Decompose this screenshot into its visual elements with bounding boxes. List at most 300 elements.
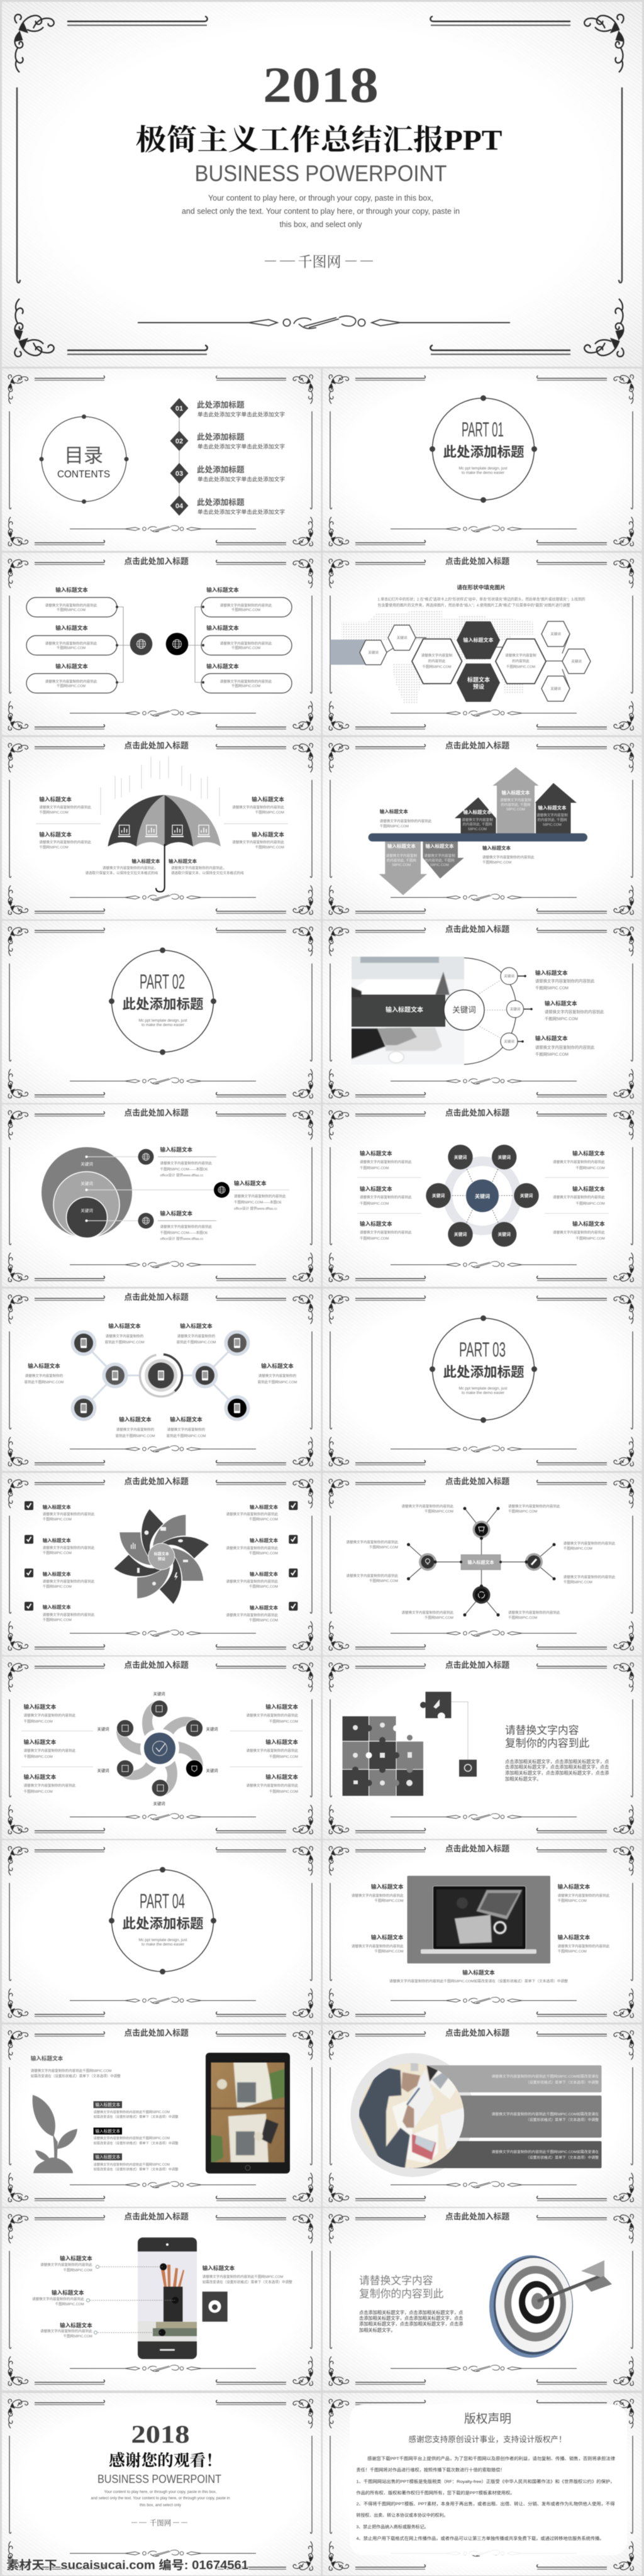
- tablet photo: [208, 2060, 287, 2165]
- pinwheel icons: [131, 1527, 188, 1585]
- left labels: 请替换文字内容复制你的内容到此: [24, 1783, 76, 1788]
- right labels: 输入标题文本: [206, 586, 239, 593]
- left checklist: 请替换文字内容复制你的内容到此: [43, 1613, 95, 1618]
- left labels: 千图网58PIC.COM: [24, 1789, 53, 1794]
- right checklist: 输入标题文本: [250, 1537, 278, 1543]
- branch end dots: [407, 1507, 556, 1616]
- branch labels: 千图网58PIC.COM: [425, 1615, 453, 1620]
- left checklist: 千图网58PIC.COM: [43, 1584, 72, 1589]
- panel: part 04 divider: [2, 1840, 321, 2023]
- year: 2018: [131, 2420, 190, 2448]
- nested circles: [42, 1147, 132, 1238]
- label upper left: 千图网58PIC.COM: [374, 1898, 404, 1903]
- label three: 请替换文字内容复制你的内容到此: [40, 2329, 92, 2334]
- icon: plant: [33, 2095, 77, 2174]
- tag two text: 如需改变请在（设置形状格式）菜单下（文本选项）中调整: [94, 2140, 178, 2145]
- ornamental frame: [8, 2031, 313, 2202]
- title: 极简主义工作总结汇报PPT: [136, 124, 502, 156]
- labels: 请替换文字内容复制你的: [177, 1333, 216, 1338]
- upper text: [380, 808, 432, 829]
- bottom labels: 请替换文字内容复制你的内容到此，: [103, 865, 158, 870]
- hexagon keyword right bottom: 关键词: [550, 686, 561, 691]
- right labels: 千图网58PIC.COM: [576, 1201, 605, 1206]
- item 02: 单击此处添加文字单击此处添加文字: [197, 443, 285, 450]
- pale ring: [448, 1161, 517, 1230]
- left labels: [24, 1703, 76, 1794]
- part caption: to make the demo easier: [142, 1942, 184, 1947]
- right labels: 千图网58PIC.COM: [269, 1789, 298, 1794]
- icon circles: [117, 1701, 203, 1796]
- arrow down light: 输入标题文本: [387, 843, 416, 849]
- label upper right: 请替换文字内容复制你的内容到此: [558, 1893, 610, 1898]
- arrow up light centre: 58PIC.COM: [506, 808, 525, 811]
- headline: 复制你的内容到此: [359, 2288, 443, 2300]
- junction dots: [434, 1537, 528, 1587]
- dotted links: [477, 980, 506, 1038]
- part number: PART 02: [140, 970, 185, 993]
- label top: 千图网58PIC.COM: [535, 985, 569, 991]
- panel: copyright slide: [323, 2393, 641, 2575]
- keyword node middle: 关键词: [510, 1006, 521, 1011]
- item 02: [170, 431, 285, 451]
- branch labels: 请替换文字内容复制你的内容到此: [564, 1541, 616, 1546]
- node bottom: [473, 1586, 491, 1604]
- arrow down light: 请替换文字内容复制: [386, 853, 418, 858]
- arrow down mid: 请替换文字内容复制: [424, 853, 455, 858]
- right labels: [206, 586, 272, 688]
- connector: [452, 1702, 468, 1760]
- navy bar: [369, 833, 587, 841]
- lower text: [482, 845, 535, 865]
- ornamental frame: [329, 1846, 633, 2018]
- item 04: [170, 496, 285, 516]
- bar one: 请替换文字内容复制你的内容到此千图网58PIC.COM如需改变请在: [492, 2074, 599, 2079]
- right labels: 千图网58PIC.COM: [231, 608, 260, 613]
- left labels: 请替换文字内容复制你的内容到此: [39, 840, 91, 845]
- arrow dart: [538, 2260, 612, 2301]
- panel: nested circles slide: [2, 1104, 321, 1287]
- ornamental frame: [8, 2399, 313, 2570]
- right label: 请替换文字内容复制你的内容到此千图网58PIC.COM: [203, 2274, 284, 2279]
- branch labels: 千图网58PIC.COM: [564, 1580, 592, 1585]
- arrow up dark right: [535, 783, 577, 833]
- pointer dots: [158, 2263, 179, 2336]
- label top: [158, 1146, 216, 1177]
- left labels: 千图网58PIC.COM: [360, 1165, 389, 1170]
- right labels: 千图网58PIC.COM: [269, 1754, 298, 1759]
- puzzle grid: [342, 1716, 424, 1796]
- hexagon large left: 的内容到此: [428, 658, 446, 663]
- right labels: 请替换文字内容复制你的内容到此: [220, 602, 272, 608]
- part caption: to make the demo easier: [142, 1023, 184, 1028]
- left checklist: 请替换文字内容复制你的内容到此: [43, 1579, 95, 1584]
- puzzle icons: [353, 1723, 413, 1786]
- label upper left: 请替换文字内容复制你的内容到此: [352, 1893, 404, 1898]
- arrow up light centre: 的内容到此, 千图网: [501, 802, 531, 808]
- left labels: 千图网58PIC.COM: [24, 1719, 53, 1724]
- left checklist: 请替换文字内容复制你的内容到此: [43, 1512, 95, 1517]
- arrow down mid: 的内容到此, 千图网: [425, 858, 455, 863]
- label middle: 千图网58PIC.COM——本图OE: [234, 1200, 282, 1205]
- loose puzzle piece: [420, 1692, 452, 1720]
- part number: PART 04: [140, 1890, 185, 1913]
- small puzzle piece: [459, 1760, 477, 1777]
- left labels: 输入标题文本: [360, 1220, 392, 1227]
- keyword labels: 关键词: [153, 1801, 165, 1806]
- hexagon dark bottom: [457, 663, 500, 702]
- right labels: 请替换文字内容复制你的内容到此: [246, 1713, 298, 1718]
- dashed leader lines: [88, 2267, 175, 2333]
- right labels: 输入标题文本: [206, 625, 239, 631]
- bar three: （设置形状格式）菜单下（文本选项）中调整: [526, 2155, 599, 2160]
- panel: part 02 divider: [2, 921, 321, 1103]
- node lower left: [70, 1395, 97, 1421]
- bar one: [426, 2065, 601, 2092]
- branch labels: 千图网58PIC.COM: [564, 1546, 592, 1551]
- headline: 复制你的内容到此: [505, 1737, 589, 1750]
- tag two text: [94, 2136, 178, 2145]
- photo label band: 输入标题文本: [386, 1006, 423, 1014]
- label lower right: 千图网58PIC.COM: [558, 1948, 587, 1953]
- right labels: 千图网58PIC.COM: [255, 810, 284, 815]
- part caption: [138, 1938, 187, 1947]
- icon: globe middle: [214, 1182, 230, 1197]
- ornamental frame: [329, 1479, 633, 1650]
- circle keywords: 关键词: [80, 1180, 93, 1186]
- ornamental frame: [8, 1111, 313, 1282]
- keyword node bottom: 关键词: [504, 1039, 514, 1044]
- right labels: [232, 796, 284, 850]
- panel: laptop slide: [323, 1840, 641, 2023]
- right labels: 请替换文字内容复制你的内容到此: [553, 1195, 605, 1200]
- paragraph: [377, 597, 585, 608]
- right checklist: 请替换文字内容复制你的内容到此: [226, 1546, 278, 1551]
- left checklist: 输入标题文本: [43, 1537, 71, 1543]
- description: and select only the text. Your content to play here, or through your copy, paste in: [91, 2497, 230, 2501]
- right labels: 请替换文字内容复制你的内容到此: [553, 1230, 605, 1235]
- arrow up dark left: 请替换文字内容复制: [462, 818, 493, 823]
- labels: 输入标题文本: [119, 1416, 152, 1423]
- left labels: 输入标题文本: [24, 1738, 57, 1745]
- hub centre: 关键词: [475, 1193, 490, 1199]
- upper text: 请替换文字内容复制你的内容到此: [380, 819, 432, 824]
- part caption: Mc ppt template design, just: [138, 1019, 187, 1023]
- right checklist: 输入标题文本: [250, 1504, 278, 1510]
- left checklist: [25, 1501, 95, 1623]
- heading text: 如需改变请在（设置形状格式）菜单下（文本选项）中调整: [31, 2074, 121, 2079]
- right labels: 千图网58PIC.COM: [231, 683, 260, 688]
- ornamental frame: [329, 559, 633, 730]
- part caption: Mc ppt template design, just: [138, 1938, 187, 1942]
- branch labels: 请替换文字内容复制你的内容到此: [508, 1610, 560, 1615]
- arrow down mid: 58PIC.COM: [430, 863, 449, 867]
- central node: [140, 1355, 182, 1396]
- dividers: [21, 1731, 303, 1767]
- labels: 输入标题文本: [108, 1323, 141, 1330]
- right labels: 输入标题文本: [206, 663, 239, 670]
- heading: 请在形状中填充图片: [457, 584, 506, 591]
- right label: 输入标题文本: [203, 2264, 235, 2271]
- slide title: 点击此处加入标题: [124, 741, 189, 750]
- arrow up dark right: 的内容到此, 千图网: [537, 818, 567, 823]
- bottom labels: 请选取只保留文本，以保持全文拉文本格式的纯: [171, 870, 244, 875]
- left labels: 请替换文字内容复制你的内容到此: [45, 641, 97, 646]
- lower text: 请替换文字内容复制你的内容到此: [482, 855, 535, 860]
- label lower right: [558, 1934, 610, 1953]
- left labels: 输入标题文本: [24, 1774, 57, 1780]
- contents heading: 目录: [64, 445, 103, 467]
- right checklist: 请替换文字内容复制你的内容到此: [226, 1613, 278, 1618]
- panel: branching network slide: [323, 1473, 641, 1655]
- label lower right: 请替换文字内容复制你的内容到此: [558, 1943, 610, 1948]
- bottom labels: 请替换文字内容复制你的内容到此，: [171, 865, 226, 870]
- label upper left: 输入标题文本: [371, 1883, 404, 1890]
- labels: 容到此千图网58PIC.COM: [25, 1380, 64, 1385]
- satellite nodes: [426, 1145, 539, 1246]
- photo: laptop at desk: [351, 956, 464, 1064]
- subtitle: BUSINESS POWERPOINT: [97, 2473, 221, 2485]
- legal text: 转授权、出卖、转让本协议或本协议中的权利。: [356, 2512, 448, 2518]
- item 03: 03: [175, 470, 183, 478]
- paragraph: 点击添加相关标题文字，点击添加相关标题文字，点: [359, 2309, 463, 2316]
- panel: plant and tablet slide: [2, 2024, 321, 2207]
- paragraph: 加相关标题文字。: [359, 2327, 396, 2333]
- panel: circular photo with bars slide: [323, 2024, 641, 2207]
- heading: 版权声明: [464, 2412, 511, 2425]
- label top: 请替换文字内容复制你的内容到此: [160, 1161, 213, 1166]
- hexagon large left: 请替换文字内容复制: [421, 653, 453, 658]
- part heading: 此处添加标题: [122, 997, 204, 1012]
- slide title: 点击此处加入标题: [445, 2028, 509, 2038]
- ornamental frame: [329, 1111, 633, 1282]
- label bottom: 请替换文字内容复制你的内容到此: [160, 1224, 213, 1229]
- bottom labels: 输入标题文本: [169, 858, 197, 864]
- panel: part 03 divider: [323, 1289, 641, 1471]
- pinwheel centre text: [154, 1552, 169, 1562]
- big arc: [464, 958, 516, 1064]
- tag one text: [94, 2109, 178, 2119]
- slide title: 点击此处加入标题: [445, 2212, 509, 2221]
- left labels: [360, 1150, 412, 1241]
- slide title: 点击此处加入标题: [124, 557, 189, 566]
- ornamental frame: [329, 375, 633, 546]
- headline: [505, 1724, 589, 1750]
- slide title: 点击此处加入标题: [445, 1108, 509, 1118]
- contents subheading: CONTENTS: [57, 469, 110, 480]
- arrow down mid: [423, 841, 464, 879]
- heading text: [31, 2055, 121, 2079]
- part heading: 此处添加标题: [443, 1365, 525, 1380]
- hexagon dark top: 输入标题文本: [463, 636, 493, 643]
- left labels: 请替换文字内容复制你的内容到此: [360, 1160, 412, 1165]
- dividers: [357, 1177, 609, 1213]
- arrow up light centre: [492, 767, 539, 833]
- thanks heading: 感谢您的观看！: [109, 2451, 222, 2470]
- pinwheel centre text: 预设: [158, 1557, 165, 1562]
- labels: 输入标题文本: [28, 1362, 60, 1369]
- node upper left: [70, 1330, 97, 1356]
- panel: hexagon slide: [323, 553, 641, 735]
- headline: [359, 2275, 443, 2300]
- label upper right: 千图网58PIC.COM: [558, 1898, 587, 1903]
- bar three: 请替换文字内容复制你的内容到此千图网58PIC.COM如需改变请在: [492, 2149, 599, 2154]
- arrow up dark right: 输入标题文本: [538, 804, 567, 811]
- panel: arrows slide: [323, 737, 641, 919]
- panel: part 01 divider: [323, 369, 641, 551]
- right label: 如需改变请在（设置形状格式）菜单下（文本选项）中调整: [203, 2279, 292, 2284]
- hexagon keyword right top: 关键词: [550, 631, 561, 636]
- ornamental frame: [14, 14, 624, 357]
- label two: 输入标题文本: [52, 2289, 84, 2296]
- leader lines: [87, 1157, 214, 1221]
- bottom labels: [85, 858, 244, 875]
- circle keywords: [80, 1161, 93, 1213]
- item 04: 单击此处添加文字单击此处添加文字: [197, 508, 285, 515]
- swirl petals: [111, 1702, 209, 1795]
- dividers: [36, 823, 288, 824]
- right checklist: 千图网58PIC.COM: [249, 1517, 278, 1522]
- part number: PART 01: [462, 418, 504, 441]
- hexagon large right: 请替换文字内容复制: [505, 653, 536, 658]
- tag one text: 如需改变请在（设置形状格式）菜单下（文本选项）中调整: [94, 2114, 178, 2119]
- satellite labels: 关键词: [520, 1192, 533, 1199]
- umbrella icons: [118, 825, 210, 836]
- keyword node top: 关键词: [504, 974, 514, 979]
- label lower left: 请替换文字内容复制你的内容到此: [352, 1943, 404, 1948]
- tag three: 输入标题文本: [96, 2154, 120, 2160]
- right labels: 请替换文字内容复制你的内容到此: [553, 1160, 605, 1165]
- part caption: Mc ppt template design, just: [458, 467, 508, 470]
- labels: 输入标题文本: [261, 1362, 294, 1369]
- panel: two-sided rounded boxes slide: [2, 553, 321, 735]
- left labels: 千图网58PIC.COM: [39, 845, 69, 850]
- item 02: 此处添加标题: [197, 432, 245, 441]
- keyword node bottom: [501, 1033, 524, 1050]
- circular photo: [358, 2063, 465, 2168]
- label bottom: 请替换文字内容复制你的内容到此: [535, 1044, 595, 1050]
- left checklist: 千图网58PIC.COM: [43, 1550, 72, 1555]
- left labels: 千图网58PIC.COM: [57, 645, 86, 650]
- right labels: 千图网58PIC.COM: [255, 845, 284, 850]
- labels: 输入标题文本: [170, 1416, 203, 1423]
- arrow up dark right: 请替换文字内容复制: [536, 813, 568, 818]
- photo label band: [352, 995, 445, 1026]
- ornamental frame: [8, 1295, 313, 1466]
- paragraph: 点击添加相关标题文字，点击添加相关标题文字，点: [505, 1758, 609, 1765]
- phone body: [138, 2238, 197, 2359]
- paragraph: 击添加相关标题文字，点击添加相关标题文字，点击: [505, 1764, 609, 1770]
- keyword labels: 关键词: [206, 1767, 218, 1774]
- tag two text: 请替换文字内容复制你的内容到此千图网58PIC.COM: [94, 2136, 170, 2141]
- label lower left: [352, 1934, 404, 1953]
- part caption: Mc ppt template design, just: [458, 1386, 508, 1391]
- part number: PART 03: [459, 1338, 506, 1361]
- hexagon keyword right middle: 关键词: [571, 659, 582, 664]
- slide title: 点击此处加入标题: [124, 2212, 189, 2221]
- legal text: 3、禁止把作品纳入商标或服务标记。: [356, 2524, 429, 2529]
- label bottom: 千图网58PIC.COM——本图OE: [160, 1230, 208, 1235]
- left labels: 千图网58PIC.COM: [360, 1201, 389, 1206]
- left labels: [45, 586, 97, 688]
- branch lines: [409, 1509, 554, 1615]
- panel: swirl hub slide: [2, 1657, 321, 1839]
- bottom labels: 请选取只保留文本，以保持全文拉文本格式的纯: [85, 870, 158, 875]
- label bottom: [158, 1210, 216, 1241]
- ornamental frame: [8, 743, 313, 914]
- right labels: 请替换文字内容复制你的内容到此: [246, 1783, 298, 1788]
- branch labels: [346, 1504, 616, 1620]
- description: [91, 2490, 230, 2507]
- panel: contents slide: [2, 369, 321, 551]
- keyword labels: [97, 1690, 218, 1806]
- laptop screen photo: [455, 1890, 522, 1944]
- panel: smartphone slide: [2, 2208, 321, 2390]
- description: Your content to play here, or through your copy, paste in this box,: [104, 2490, 217, 2494]
- ornamental frame: [329, 1295, 633, 1466]
- ornamental frame: [8, 1663, 313, 1834]
- pale disc: [351, 2053, 474, 2177]
- part ring: [109, 1867, 216, 1975]
- centre box: [461, 1555, 501, 1570]
- panel: keyword photo slide: [323, 921, 641, 1103]
- part ring: [109, 947, 216, 1055]
- keyword circle: 关键词: [452, 1006, 476, 1014]
- hexagon keyword upper: 关键词: [397, 635, 408, 640]
- rounded box group right: [201, 597, 292, 693]
- branch labels: 请替换文字内容复制你的内容到此: [401, 1610, 453, 1615]
- item 03: [170, 463, 285, 484]
- leader dots: [86, 1155, 88, 1222]
- watermark: 素材天下 sucaisucai.com 编号: 01674561: [6, 2558, 248, 2572]
- right labels: 输入标题文本: [265, 1774, 298, 1780]
- laptop: [421, 1886, 536, 1954]
- paragraph: 添加相关标题文字，点击添加相关标题文字，点击添: [359, 2321, 463, 2327]
- description: this box, and select only: [140, 2504, 181, 2507]
- pinwheel chart: [114, 1509, 209, 1604]
- node top: [473, 1521, 491, 1538]
- arrow up dark left: 的内容到此, 千图网: [462, 821, 492, 826]
- label three: 千图网58PIC.COM: [64, 2334, 92, 2339]
- left labels: 输入标题文本: [360, 1150, 392, 1157]
- left labels: 输入标题文本: [55, 586, 88, 593]
- label one: 千图网58PIC.COM: [64, 2267, 92, 2272]
- right checklist: [226, 1501, 297, 1623]
- branch labels: 千图网58PIC.COM: [508, 1615, 538, 1620]
- brand mark: [131, 2519, 187, 2527]
- umbrella canopy: [108, 795, 221, 847]
- right labels: 输入标题文本: [265, 1703, 298, 1710]
- panel: pinwheel checklist slide: [2, 1473, 321, 1655]
- bottom label: 输入标题文本: [462, 1968, 495, 1976]
- arrow down light: 58PIC.COM: [392, 863, 411, 867]
- keyword labels: 关键词: [153, 1690, 165, 1697]
- right labels: 输入标题文本: [572, 1185, 605, 1192]
- bottom label: [389, 1968, 569, 1984]
- network links: [84, 1343, 237, 1408]
- right labels: 请替换文字内容复制你的内容到此: [246, 1748, 298, 1753]
- arrow up dark left: [455, 797, 496, 833]
- slide title: 点击此处加入标题: [124, 1660, 189, 1670]
- paragraph: 击添加相关标题文字，点击添加相关标题文字，点击: [359, 2316, 463, 2321]
- tag three text: [94, 2162, 178, 2172]
- bar two: [448, 2096, 601, 2138]
- arrow down light: [379, 841, 427, 895]
- panel: phone network slide: [2, 1289, 321, 1471]
- arrow up dark left: 58PIC.COM: [468, 828, 487, 831]
- heading text: 输入标题文本: [31, 2055, 64, 2062]
- left checklist: 输入标题文本: [43, 1504, 71, 1510]
- part caption: to make the demo easier: [462, 1391, 504, 1395]
